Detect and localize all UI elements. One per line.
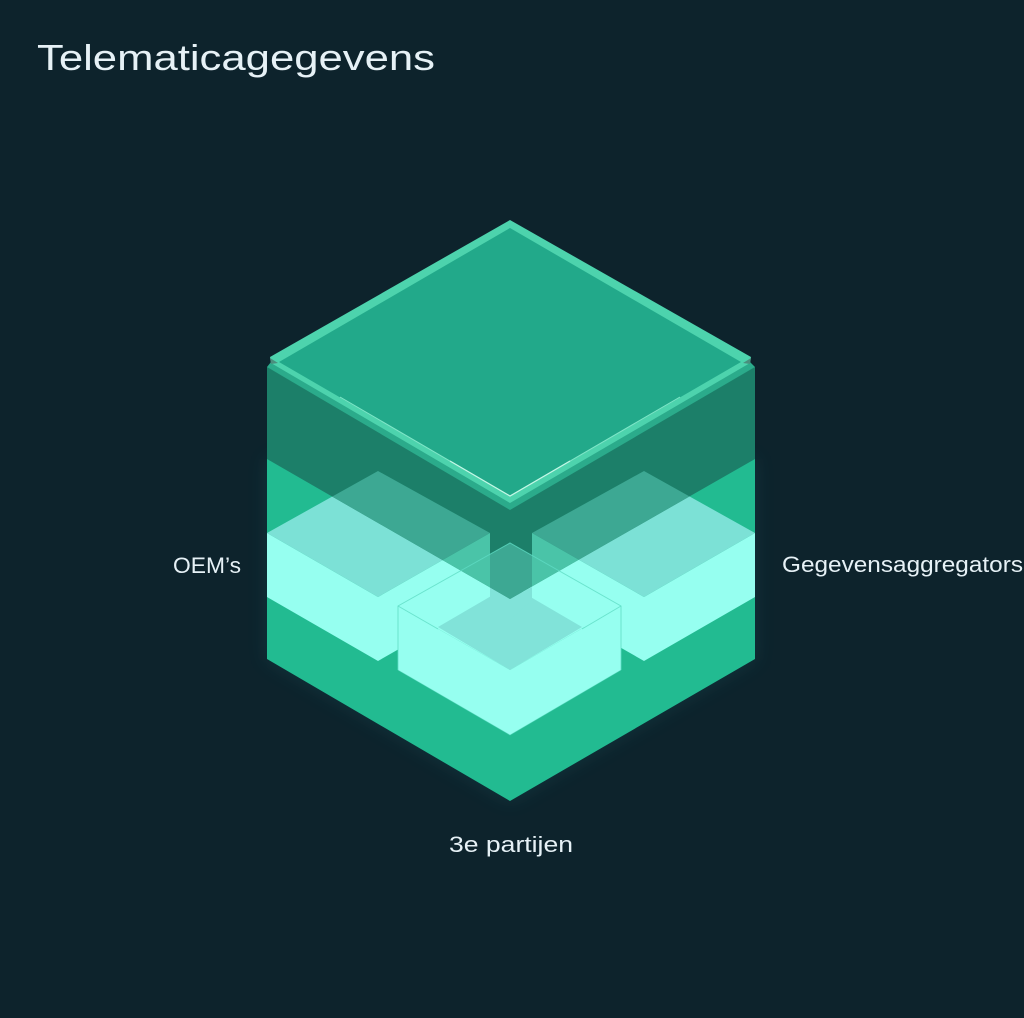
block: Gegevensaggregators bbox=[532, 471, 755, 661]
plate corner notch: right bbox=[743, 358, 751, 364]
base layer bbox=[267, 367, 755, 801]
block: 3e partijen bbox=[398, 543, 621, 735]
isometric stacked cube diagram bbox=[267, 220, 755, 801]
plate corner notch: left bbox=[270, 358, 278, 364]
block: OEM's bbox=[267, 471, 490, 661]
label: 3e partijen: 3e partijen bbox=[449, 832, 573, 857]
cube glow bbox=[267, 459, 755, 801]
plate highlight tip bbox=[450, 461, 570, 496]
label: Gegevensaggregators: Gegevensaggregators bbox=[782, 552, 1023, 577]
outline: 3e partijen block bbox=[398, 543, 621, 735]
plate light rim bbox=[270, 220, 751, 503]
plate dark rim bbox=[267, 362, 755, 510]
plate face bbox=[279, 228, 741, 496]
translucent dark wall bbox=[267, 368, 755, 599]
plate highlight bbox=[340, 397, 680, 496]
top plate bbox=[267, 220, 755, 510]
title: Telematicagegevens bbox=[37, 37, 435, 78]
label: OEM's: OEM’s bbox=[173, 553, 241, 578]
